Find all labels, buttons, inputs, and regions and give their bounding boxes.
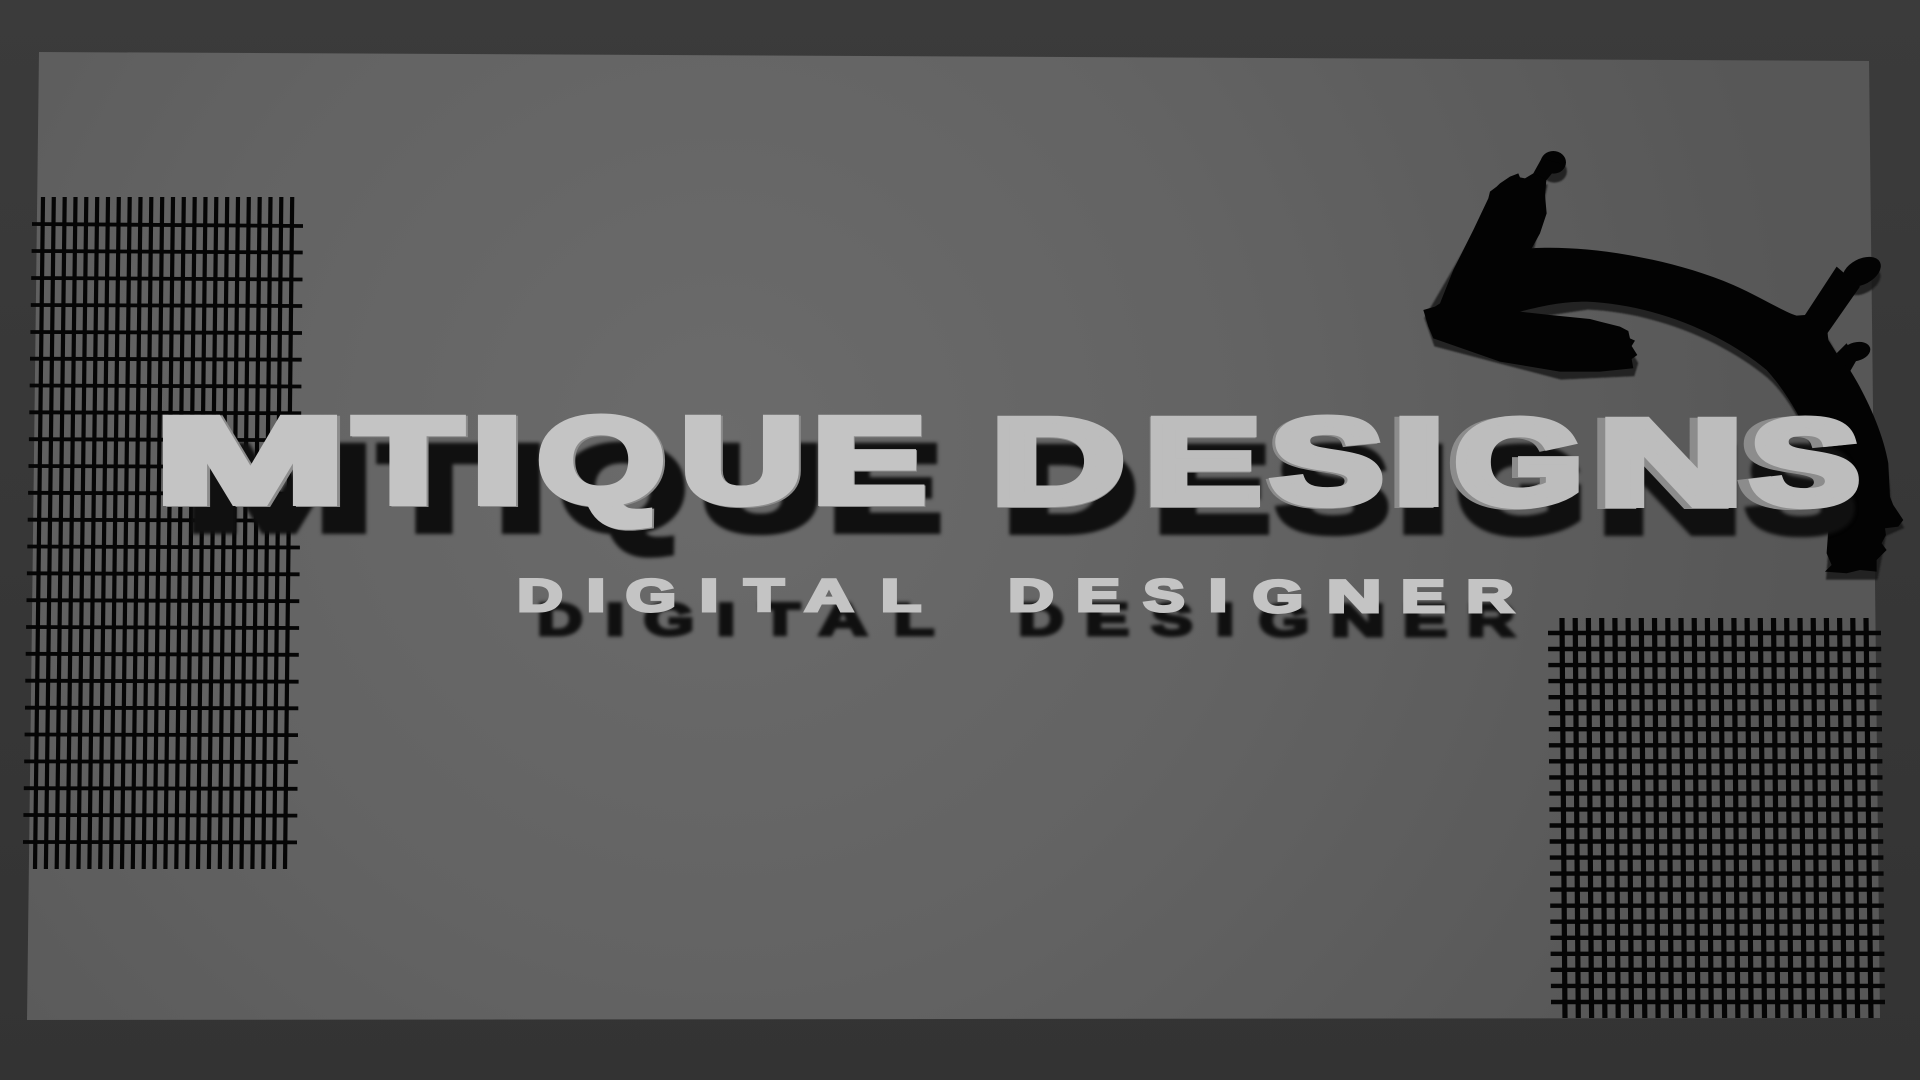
subtitle: DIGITAL DESIGNER: G — [1253, 571, 1303, 622]
title 3D side extrusion: Q — [539, 393, 667, 529]
title: MTIQUE DESIGNS: Q — [537, 392, 665, 528]
subtitle cast shadow: I — [606, 594, 624, 645]
title 3D side extrusion: E — [1144, 394, 1260, 530]
title cast shadow: E — [1154, 421, 1270, 557]
subtitle: DIGITAL DESIGNER: L — [881, 570, 921, 621]
subtitle cast shadow: L — [894, 594, 934, 645]
subtitle cast shadow: T — [760, 594, 800, 645]
subtitle: DIGITAL DESIGNER: E — [1076, 570, 1120, 621]
subtitle cast shadow: R — [1467, 595, 1515, 646]
title 3D side extrusion: G — [1449, 395, 1577, 531]
subtitle cast shadow: G — [644, 594, 694, 645]
title cast shadow: G — [1457, 422, 1585, 558]
title cast shadow: I — [1397, 421, 1449, 557]
subtitle: DIGITAL DESIGNER: S — [1143, 570, 1185, 621]
title 3D side extrusion: E — [813, 393, 927, 529]
title: MTIQUE DESIGNS: T — [354, 392, 461, 528]
title: MTIQUE DESIGNS: N — [1598, 394, 1744, 530]
subtitle: DIGITAL DESIGNER: I — [587, 570, 605, 621]
title: MTIQUE DESIGNS: E — [1145, 393, 1261, 529]
subtitle: DIGITAL DESIGNER: R — [1466, 571, 1514, 622]
title: MTIQUE DESIGNS: E — [812, 392, 926, 528]
subtitle cast shadow: I — [717, 594, 735, 645]
title: MTIQUE DESIGNS: I — [472, 392, 522, 528]
title: MTIQUE DESIGNS: I — [1393, 393, 1445, 529]
title: MTIQUE DESIGNS: S — [1750, 394, 1860, 530]
title cast shadow: M — [184, 420, 373, 556]
title cast shadow: U — [699, 420, 822, 556]
subtitle: DIGITAL DESIGNER: D — [517, 570, 563, 621]
subtitle: DIGITAL DESIGNER: E — [1401, 571, 1445, 622]
subtitle: DIGITAL DESIGNER: I — [700, 570, 718, 621]
right black grid — [1548, 618, 1885, 1018]
title 3D side extrusion: U — [682, 393, 805, 529]
subtitle: DIGITAL DESIGNER: T — [744, 570, 784, 621]
subtitle cast shadow: D — [1018, 594, 1063, 645]
title 3D side extrusion: S — [1267, 394, 1381, 530]
title 3D side extrusion: D — [991, 394, 1125, 530]
title 3D side extrusion: I — [474, 393, 524, 529]
arrow shadow — [1424, 160, 1904, 580]
title 3D side extrusion: M — [158, 393, 347, 529]
title: MTIQUE DESIGNS: U — [680, 392, 804, 528]
title 3D side extrusion: N — [1590, 395, 1736, 531]
title cast shadow: T — [380, 420, 487, 556]
subtitle: DIGITAL DESIGNER: G — [626, 570, 676, 621]
left black grid — [23, 197, 303, 869]
subtitle: DIGITAL DESIGNER: D — [1008, 570, 1053, 621]
title: MTIQUE DESIGNS: S — [1270, 393, 1384, 529]
title: MTIQUE DESIGNS: M — [155, 392, 344, 528]
subtitle cast shadow: E — [1403, 595, 1447, 646]
subtitle cast shadow: S — [1151, 594, 1192, 645]
title: MTIQUE DESIGNS: D — [991, 393, 1125, 529]
subtitle cast shadow: I — [1215, 594, 1234, 645]
subtitle cast shadow: G — [1258, 595, 1309, 646]
title: MTIQUE DESIGNS: G — [1455, 394, 1583, 530]
subtitle cast shadow: A — [819, 594, 867, 645]
subtitle: DIGITAL DESIGNER: I — [1209, 570, 1227, 621]
title cast shadow: N — [1597, 422, 1742, 558]
title cast shadow: I — [496, 420, 546, 556]
title 3D side extrusion: T — [356, 393, 464, 529]
title cast shadow: Q — [559, 420, 687, 556]
arrow: black brush-stroke curved arrow — [1423, 151, 1903, 573]
title cast shadow: S — [1276, 421, 1390, 557]
title 3D side extrusion: I — [1388, 394, 1440, 530]
subtitle: DIGITAL DESIGNER: N — [1327, 571, 1381, 622]
subtitle cast shadow: N — [1331, 595, 1385, 646]
subtitle: DIGITAL DESIGNER: A — [805, 570, 853, 621]
title cast shadow: D — [1003, 421, 1137, 557]
subtitle cast shadow: E — [1085, 594, 1129, 645]
subtitle cast shadow: D — [537, 594, 583, 645]
title cast shadow: E — [828, 420, 942, 556]
title 3D side extrusion: S — [1739, 395, 1849, 531]
title cast shadow: S — [1746, 422, 1856, 558]
